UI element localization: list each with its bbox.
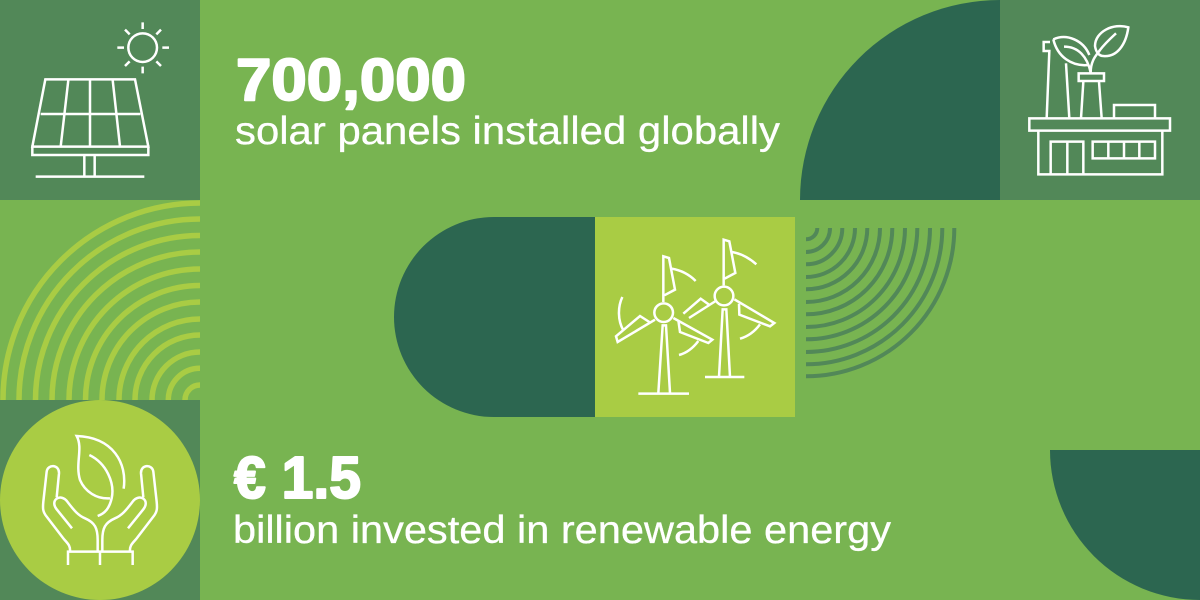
dark quarter circle: top right bbox=[800, 0, 1000, 200]
panel: wind turbine tile bbox=[595, 217, 795, 417]
panel: factory tile bbox=[1000, 0, 1200, 200]
dark half pill: centre bbox=[394, 217, 595, 417]
panel: hands tile bbox=[0, 400, 200, 600]
stat: investment bbox=[233, 445, 892, 552]
caption: investment: billion invested in renewable energy bbox=[233, 509, 892, 552]
stat: solar panels bbox=[235, 47, 781, 153]
decorative arcs: dark concentric quarter circles bbox=[806, 228, 954, 376]
icon: two wind turbines bbox=[616, 240, 774, 394]
caption: solar panels: solar panels installed globally bbox=[235, 110, 781, 153]
number: 700,000: 700,000 bbox=[236, 47, 466, 113]
panel: solar panel tile bbox=[0, 0, 200, 200]
decorative arcs: lime concentric quarter circles bbox=[3, 203, 200, 400]
icon: hands holding leaf bbox=[43, 436, 157, 565]
number: euro 1.5: € 1.5 bbox=[234, 445, 361, 511]
dark quarter circle: bottom right bbox=[1050, 450, 1200, 600]
lime circle bbox=[0, 400, 200, 600]
icon: factory with leaves bbox=[1029, 26, 1170, 174]
icon: sun and solar panel bbox=[32, 22, 169, 177]
